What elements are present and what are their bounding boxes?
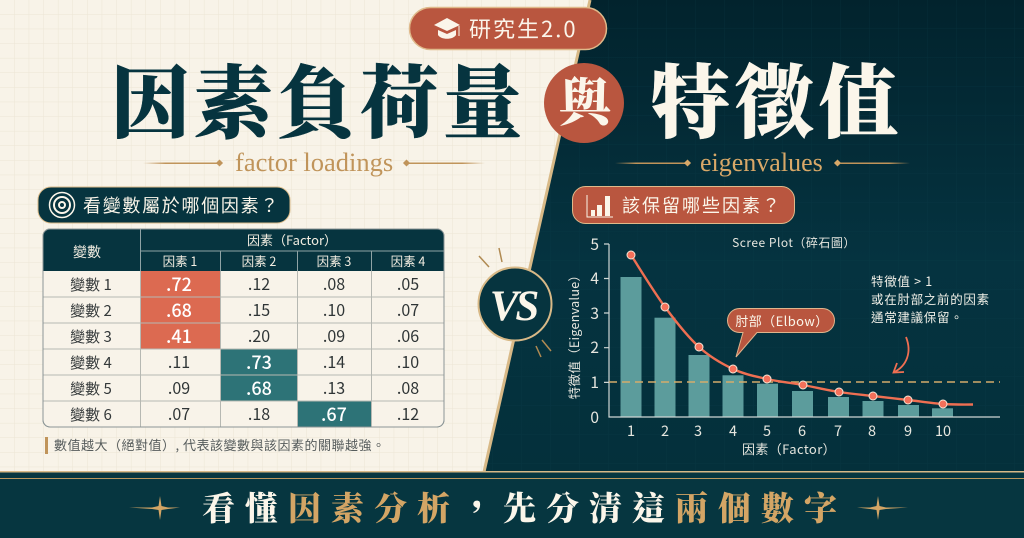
table values: .05: [397, 271, 419, 295]
axis labels: 特徵值（Eigenvalue）: [564, 269, 583, 399]
axis labels: 0: [590, 406, 599, 428]
table: factor loadings: [43, 229, 444, 427]
table values: .14: [323, 349, 345, 373]
axis labels: 6: [798, 420, 806, 441]
axis labels: 1: [627, 420, 635, 441]
callout: elbow: 肘部（Elbow）: [735, 311, 829, 330]
title: 特徵值: 特徵值: [650, 39, 902, 154]
table values: .09: [323, 323, 345, 347]
table values: .08: [323, 271, 345, 295]
axis labels: Scree Plot（碎石圖）: [732, 234, 856, 251]
VS badge: VS: [490, 283, 538, 330]
table values: [166, 271, 419, 427]
table values: .12: [397, 401, 419, 425]
table values: .07: [168, 401, 190, 425]
row labels: 變數 1: [70, 274, 112, 295]
row labels: [70, 274, 112, 425]
subtitle: factor loadings: [143, 147, 485, 177]
row labels: 變數 3: [70, 326, 112, 347]
table values: .13: [323, 375, 345, 399]
table header: 因素 3: [317, 251, 351, 270]
row labels: 變數 2: [70, 300, 112, 321]
connector circle: 與: 與: [559, 61, 620, 136]
table values: .10: [397, 349, 419, 373]
badge: 研究生 2.0: 研究生2.0: [469, 12, 578, 44]
axis labels: 5: [763, 420, 771, 441]
table values: .08: [397, 375, 419, 399]
connector circle: 與: [544, 61, 624, 143]
row labels: 變數 4: [70, 352, 112, 373]
axis labels: 8: [868, 420, 876, 441]
icon: bar chart: [587, 195, 613, 217]
table values: .20: [248, 323, 270, 347]
highlighted cells: [140, 271, 372, 427]
table values: .72: [166, 271, 192, 297]
table values: .10: [323, 297, 345, 321]
table values: .11: [168, 349, 190, 373]
table note: 數值越大（絕對值）, 代表該變數與該因素的關聯越強。: [54, 435, 386, 454]
panel: dark background: [484, 0, 1024, 472]
chart: scree plot: [564, 233, 1000, 458]
axis labels: 7: [834, 420, 842, 441]
table values: .18: [248, 401, 270, 425]
table values: .06: [397, 323, 419, 347]
bars: [620, 277, 953, 417]
icon: left sparkle: [129, 496, 180, 520]
threshold line: [609, 381, 1000, 383]
curve points: [627, 251, 947, 408]
row labels: 變數 5: [70, 378, 112, 399]
axes: [604, 244, 1000, 417]
axis labels: 2: [661, 420, 669, 441]
axis labels: 3: [590, 302, 599, 324]
annotation text: [871, 271, 990, 326]
title: 因素負荷量: 因素負荷量: [111, 40, 526, 154]
table header: 變數: [73, 242, 101, 262]
axis labels: 4: [729, 420, 737, 441]
table values: .07: [397, 297, 419, 321]
table values: .09: [168, 375, 190, 399]
axis labels: 4: [590, 267, 599, 289]
axis labels: 9: [904, 420, 912, 441]
axis labels: 10: [935, 420, 951, 441]
axis labels: 因素（Factor）: [742, 439, 836, 458]
subtitle: factor loadings: factor loadings: [235, 147, 393, 177]
arrow: to threshold: [894, 337, 909, 372]
heading pill: 該保留哪些因素？: [572, 186, 794, 224]
callout: elbow: [728, 308, 834, 357]
table header: 因素 2: [242, 251, 276, 270]
annotation text: 通常建議保留。: [871, 307, 963, 326]
icon: graduation cap: [434, 18, 460, 39]
table values: .68: [246, 375, 272, 401]
footer banner: [0, 471, 1024, 538]
table header: 因素（Factor）: [247, 230, 337, 249]
table values: .68: [166, 297, 192, 323]
badge: 研究生 2.0: [410, 8, 606, 50]
axis labels: 1: [590, 371, 599, 393]
icon: target: [50, 192, 74, 218]
table values: .73: [246, 349, 272, 375]
axis labels: 5: [590, 233, 599, 255]
annotation text: 特徵值 > 1: [871, 271, 933, 290]
row labels: 變數 6: [70, 404, 112, 425]
table header: 因素 1: [163, 251, 197, 270]
heading pill: 看變數屬於哪個因素？: 看變數屬於哪個因素？: [83, 192, 280, 218]
subtitle: eigenvalues: [615, 148, 910, 177]
table header: [43, 229, 444, 271]
axis labels: 3: [694, 420, 702, 441]
table values: .41: [166, 323, 192, 349]
heading pill: 該保留哪些因素？: 該保留哪些因素？: [622, 192, 782, 218]
subtitle: eigenvalues: eigenvalues: [700, 148, 823, 177]
table values: .15: [248, 297, 270, 321]
VS badge: [478, 248, 552, 357]
table values: .67: [321, 401, 347, 427]
eigenvalue curve: [631, 255, 973, 405]
annotation text: 或在肘部之前的因素: [871, 289, 990, 308]
axis labels: [564, 233, 951, 458]
heading pill: 看變數屬於哪個因素？: [38, 187, 290, 223]
table values: .12: [248, 271, 270, 295]
table header: 因素 4: [391, 251, 425, 270]
axis labels: 2: [590, 336, 599, 358]
footer text: 看懂因素分析，先分清這兩個數字: [202, 483, 847, 530]
icon: right sparkle: [857, 496, 908, 520]
